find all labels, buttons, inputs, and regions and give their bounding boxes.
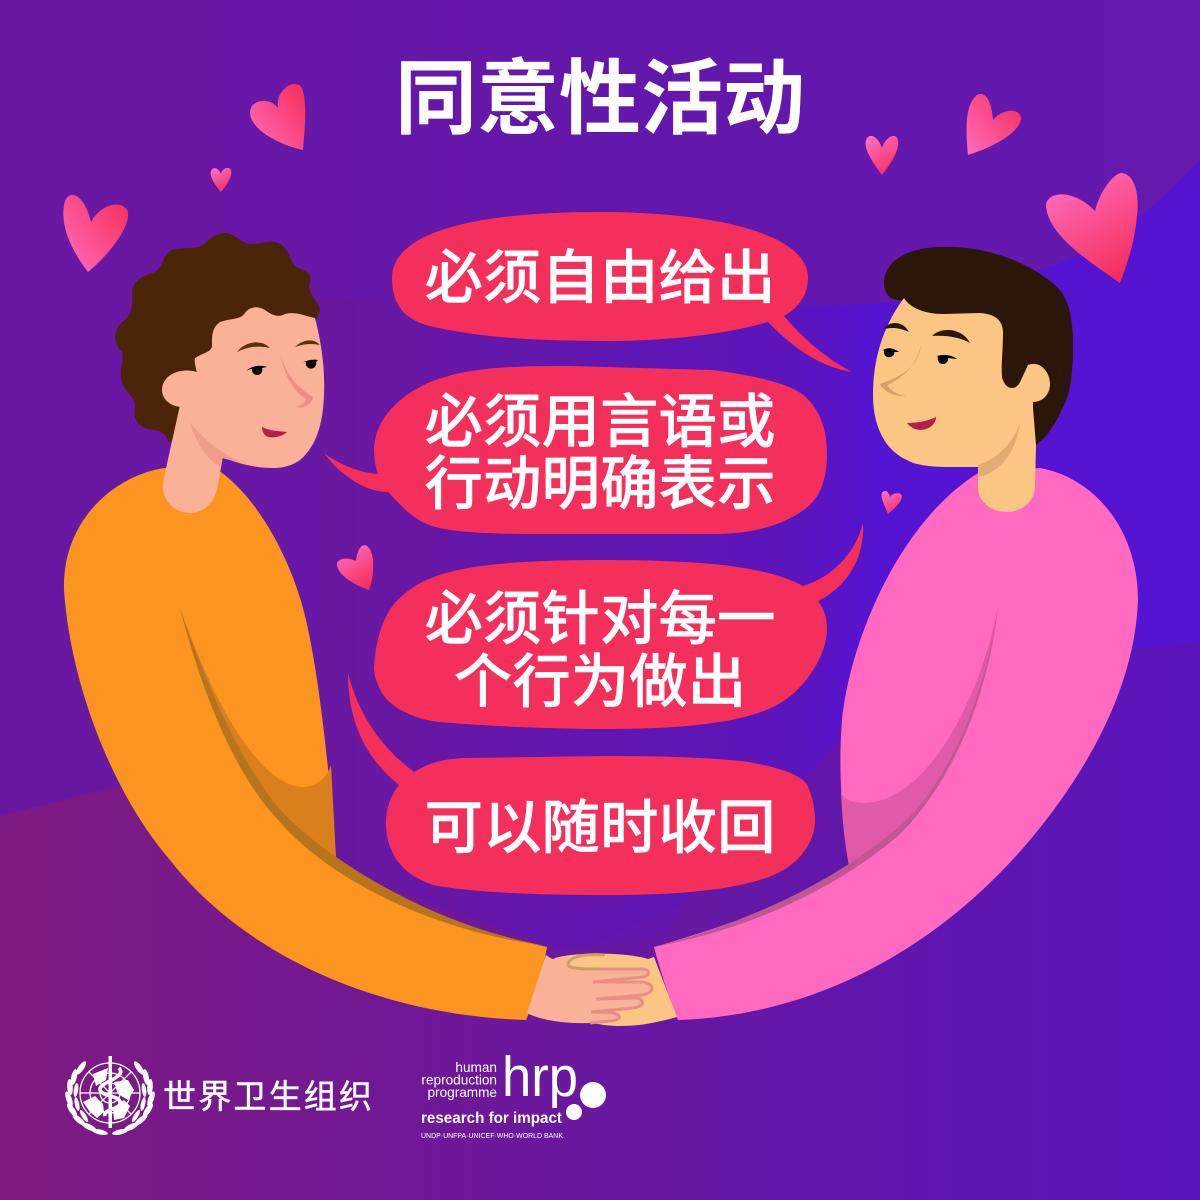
hair [115,233,320,443]
HRP wordmark: hrp [502,1045,578,1109]
HRP descriptor: reproduction [421,1072,497,1088]
left wreath [64,1060,156,1136]
nose [280,355,313,408]
speech bubble 3 [374,523,863,729]
orange sweater [64,468,547,1020]
heart: top right small [866,136,898,175]
heart: top left small [211,168,231,192]
thumb line [568,955,605,969]
person left: man in orange [64,233,547,1020]
face [873,298,1033,467]
person right: man in pink [654,247,1138,1020]
ear [1022,364,1050,402]
bubble 3 text: 个行为做出 [454,650,746,715]
sweater fold line [654,606,998,947]
neck shadow [978,423,1020,477]
heart: centre left [337,545,373,590]
heart: left large [63,195,128,272]
hair [884,247,1073,445]
bubble 2 text: 行动明确表示 [424,452,776,517]
HRP tagline: research for impact [421,1110,562,1127]
mouth [262,427,287,437]
heart: right large [1046,173,1138,283]
finger lines [590,969,652,1023]
heart: top right medium [967,94,1021,155]
HRP descriptor: human [455,1060,497,1075]
HRP dots [566,1082,606,1120]
heart: top left large [250,84,305,150]
speech bubble 2 [324,366,827,534]
nose [880,345,921,396]
continents [83,1068,134,1120]
eyes [246,360,318,375]
pink sweater [654,468,1138,1020]
eyebrows [237,340,320,352]
HRP logo [421,1045,606,1140]
ear [162,371,200,407]
sweater shadow [180,608,336,858]
WHO emblem [64,1056,156,1136]
eyebrows [884,323,970,343]
heart: right tiny [882,491,902,514]
speech bubble 1 [392,212,852,372]
HRP partners: UNDP·UNFPA·UNICEF·WHO·WORLD BANK [421,1131,563,1140]
neck [163,405,224,513]
mouth [907,417,936,430]
staff and serpent [108,1056,112,1128]
neck shadow [190,422,245,467]
title: 同意性活动 [395,54,805,145]
left hand [527,955,652,1023]
WHO name: 世界卫生组织 [163,1078,372,1115]
clasped hands [527,954,677,1026]
neck [978,395,1036,512]
globe [80,1063,140,1123]
sweater fold line [180,608,547,946]
bubble 1 text: 必须自由给出 [424,246,776,311]
bubble 2 text: 必须用言语或 [424,390,776,455]
bubble 4 text: 可以随时收回 [424,796,776,861]
face [180,307,324,468]
sweater shadow [841,606,998,866]
HRP descriptor: programme [427,1085,497,1100]
right wreath [132,1060,146,1076]
right hand [555,954,677,1026]
speech bubble 4 [348,673,815,895]
bubble 3 text: 必须针对每一 [424,587,776,652]
eyes [883,348,957,364]
